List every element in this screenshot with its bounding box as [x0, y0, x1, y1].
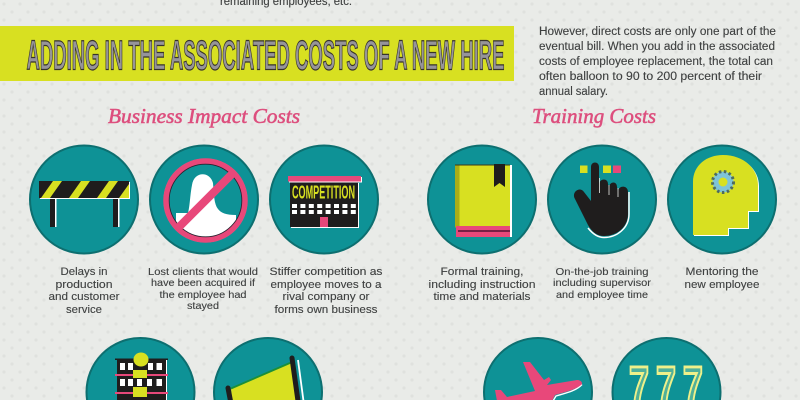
- icon: 777 numerals: [612, 338, 720, 400]
- text block: direct costs explanation: annual salary.: [539, 86, 608, 98]
- caption: on-the-job training: and employee time: [556, 290, 648, 301]
- caption: stiffer competition: rival company or: [282, 291, 370, 303]
- icon: head with gear: [668, 146, 776, 254]
- caption: on-the-job training: On-the-job training: [556, 267, 649, 278]
- caption: lost clients: Lost clients that would: [148, 267, 258, 278]
- icon: airplane: [484, 338, 592, 400]
- icon: road barrier: [30, 146, 138, 254]
- caption: stiffer competition: [270, 266, 383, 316]
- caption: stiffer competition: forms own business: [274, 304, 378, 316]
- icon: book: [428, 146, 536, 254]
- caption: mentoring: new employee: [684, 279, 760, 291]
- icon: pointing hand: [548, 146, 656, 254]
- text block: direct costs explanation: [539, 26, 776, 98]
- caption: delays: Delays in: [60, 266, 108, 278]
- caption: mentoring: [684, 266, 760, 291]
- caption: stiffer competition: Stiffer competition as: [270, 266, 383, 278]
- icon: lost client prohibited: [150, 146, 258, 254]
- icon: flag banner: [214, 338, 322, 400]
- title banner: [0, 26, 514, 81]
- caption: formal training: [428, 266, 536, 303]
- heading: business impact costs: Business Impact Costs: [108, 104, 300, 128]
- caption: stiffer competition: employee moves to a: [270, 279, 382, 291]
- caption: lost clients: the employee had: [160, 290, 247, 301]
- caption: formal training: Formal training,: [440, 266, 524, 278]
- icon: office building: [86, 338, 194, 400]
- icon: competition storefront: [270, 146, 378, 254]
- caption: formal training: time and materials: [434, 291, 531, 303]
- caption: delays: [48, 266, 120, 316]
- text block: direct costs explanation: often balloon to 90 to 200 percent of their: [539, 71, 762, 83]
- caption: delays: service: [66, 304, 102, 316]
- text block: direct costs explanation: costs of employee replacement, the total can: [539, 56, 773, 68]
- text block: direct costs explanation: However, direct costs are only one part of the: [539, 26, 776, 38]
- caption: formal training: including instruction: [428, 279, 536, 291]
- caption: on-the-job training: including supervisor: [553, 278, 652, 289]
- caption: on-the-job training: [553, 267, 652, 301]
- caption: delays: and customer: [48, 291, 120, 303]
- caption: lost clients: [148, 267, 258, 312]
- text block: direct costs explanation: eventual bill. When you add in the associated: [539, 41, 775, 53]
- caption: delays: production: [56, 279, 112, 291]
- heading: training costs: Training Costs: [532, 104, 656, 128]
- caption: lost clients: have been acquired if: [151, 278, 255, 289]
- sign text: COMPETITION: [292, 182, 355, 202]
- caption: mentoring: Mentoring the: [686, 266, 758, 278]
- caption: lost clients: stayed: [187, 301, 219, 312]
